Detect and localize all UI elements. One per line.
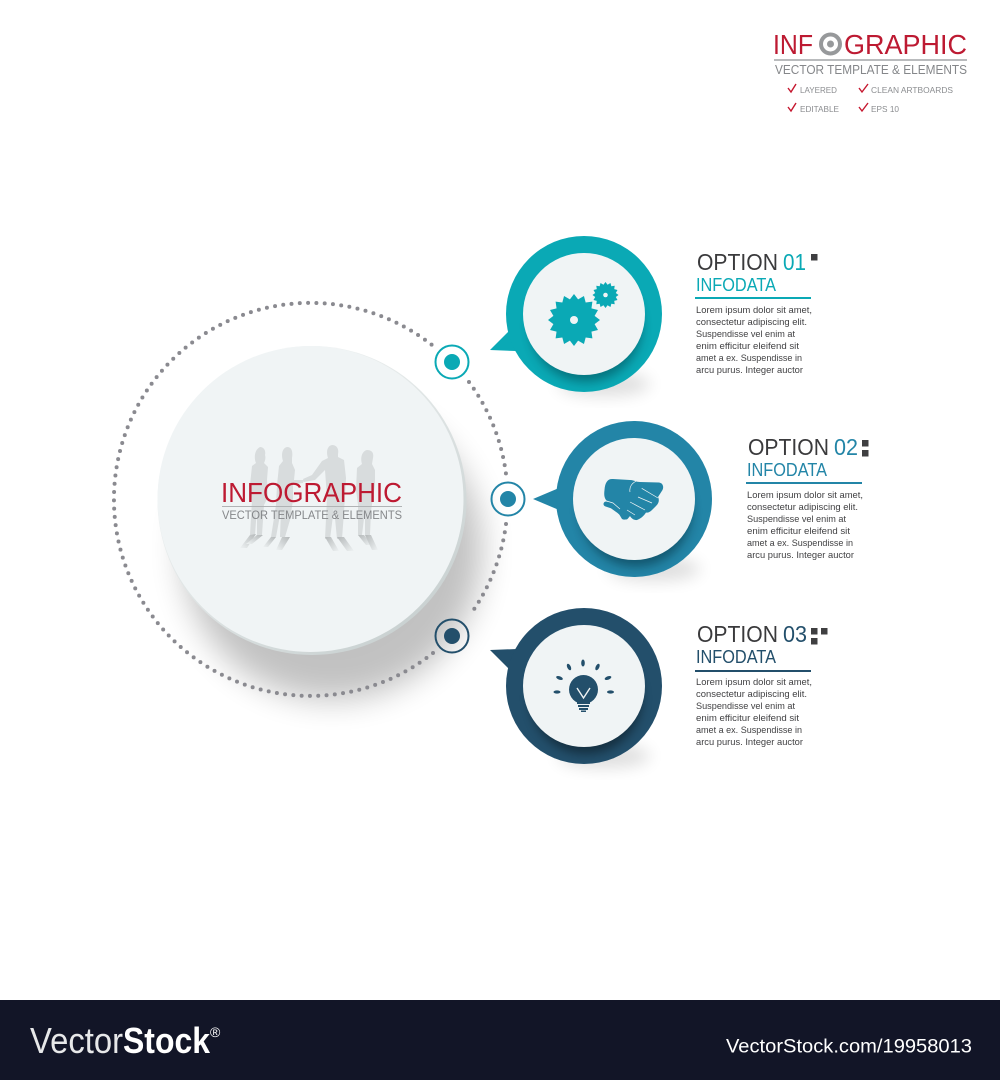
badge 2: handshake <box>533 421 712 581</box>
text block: option 01 <box>695 249 818 376</box>
foot shadows <box>240 534 256 548</box>
body: consectetur adipiscing elit. <box>696 689 807 700</box>
subheading: INFODATA <box>747 460 827 480</box>
icon: gears <box>548 282 618 346</box>
body: arcu purus. Integer auctor <box>696 737 803 748</box>
logo title: GRAPHIC <box>844 29 967 60</box>
feature checklist <box>788 84 953 114</box>
text block: option 02 <box>746 434 868 561</box>
body: arcu purus. Integer auctor <box>747 550 854 561</box>
logo title: INF <box>773 29 813 60</box>
centre subtitle: VECTOR TEMPLATE & ELEMENTS <box>222 508 402 522</box>
dotted orbit <box>114 303 506 696</box>
centre title: INFOGRAPHIC <box>221 477 402 508</box>
footer wordmark: Vector <box>30 1020 123 1061</box>
icon: handshake <box>604 479 663 520</box>
body <box>696 305 812 376</box>
text block: option 01: 01 <box>783 249 806 275</box>
footer bar: Stock <box>123 1020 211 1061</box>
feature checklist: EDITABLE <box>800 104 839 114</box>
pointer <box>533 488 559 510</box>
person 4 <box>356 450 375 535</box>
body <box>747 490 863 561</box>
body: amet a ex. Suspendisse in <box>696 725 802 736</box>
people silhouettes <box>240 445 378 551</box>
footer bar: ® <box>210 1024 221 1040</box>
badge 1: gears <box>490 236 662 396</box>
feature checklist: CLEAN ARTBOARDS <box>871 85 953 95</box>
pointer <box>490 331 516 351</box>
body: Suspendisse vel enim at <box>747 514 846 525</box>
node 3 <box>436 620 468 652</box>
icon: bulb <box>554 660 614 712</box>
logo title <box>773 29 967 60</box>
body: amet a ex. Suspendisse in <box>696 353 802 364</box>
subheading: INFODATA <box>696 647 776 667</box>
body: consectetur adipiscing elit. <box>696 317 807 328</box>
heading: OPTION <box>697 249 778 275</box>
body: Lorem ipsum dolor sit amet, <box>696 677 812 688</box>
logo subtitle: VECTOR TEMPLATE & ELEMENTS <box>775 63 967 77</box>
body: Lorem ipsum dolor sit amet, <box>747 490 863 501</box>
body <box>696 677 812 748</box>
body: Lorem ipsum dolor sit amet, <box>696 305 812 316</box>
body: arcu purus. Integer auctor <box>696 365 803 376</box>
node 1 <box>436 346 468 378</box>
body: enim efficitur eleifend sit <box>696 713 799 724</box>
footer url: VectorStock.com/19958013 <box>726 1036 972 1058</box>
feature checklist: EPS 10 <box>871 104 899 114</box>
main circle <box>158 346 466 655</box>
pointer <box>490 649 517 669</box>
text block: option 03 <box>695 621 828 748</box>
person 1 <box>250 447 268 535</box>
feature checklist: LAYERED <box>800 85 837 95</box>
body: enim efficitur eleifend sit <box>747 526 850 537</box>
node 2 <box>492 482 524 516</box>
logo: top right <box>773 29 967 114</box>
text block: option 02: 02 <box>834 434 858 460</box>
heading: OPTION <box>697 621 778 647</box>
body: amet a ex. Suspendisse in <box>747 538 853 549</box>
badge 3: light bulb <box>490 608 662 768</box>
body: Suspendisse vel enim at <box>696 329 795 340</box>
subheading: INFODATA <box>696 275 776 295</box>
heading: OPTION <box>748 434 829 460</box>
person 3 <box>303 445 346 539</box>
body: Suspendisse vel enim at <box>696 701 795 712</box>
body: enim efficitur eleifend sit <box>696 341 799 352</box>
body: consectetur adipiscing elit. <box>747 502 858 513</box>
text block: option 03: 03 <box>783 621 807 647</box>
person 2 <box>271 447 304 537</box>
footer bar <box>0 1000 1000 1080</box>
main circle shadow <box>182 400 482 700</box>
